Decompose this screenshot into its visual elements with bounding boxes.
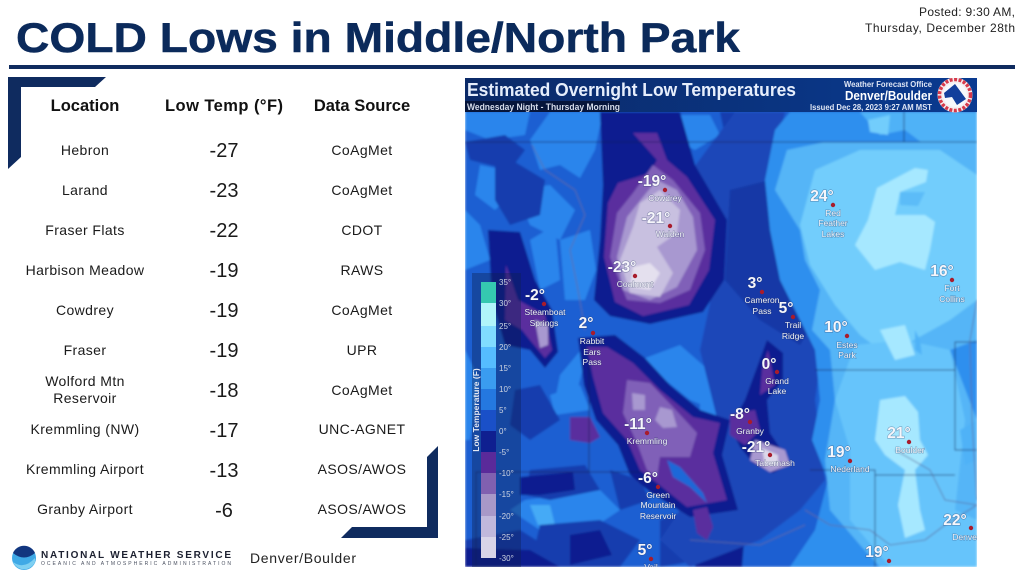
central Rockies dark band: [660, 112, 825, 567]
legend tick labels: -25°: [499, 533, 514, 542]
row: Wolford Mtn Reservoir: [45, 373, 393, 406]
row: Kremmling (NW): UNC-AGNET: [319, 421, 405, 437]
map panel: estimated overnight low temperatures: [465, 78, 980, 572]
Kremmling cold valley: [578, 335, 738, 517]
station names: Steamboat: [524, 307, 566, 317]
table header: [51, 97, 410, 115]
icon: NWS seal: [938, 78, 972, 112]
legend tick labels: -10°: [499, 469, 514, 478]
footer: NWS logo and office: [12, 546, 356, 570]
row: Fraser Flats: -22: [210, 220, 238, 242]
table header: Low Temp (°F): [165, 97, 283, 115]
station names: Lakes: [822, 229, 844, 239]
row: Cowdrey: [56, 300, 393, 322]
row: Kremmling Airport: ASOS/AWOS: [318, 461, 406, 477]
posted timestamp: Posted: 9:30 AM,: [919, 5, 1015, 19]
station names: Grand: [765, 376, 789, 386]
row: Granby Airport: [37, 500, 406, 522]
table: low temperatures by location: [26, 97, 410, 522]
legend tick labels: -30°: [499, 554, 514, 563]
station names: Park: [838, 350, 856, 360]
office name: Denver/Boulder: [250, 550, 356, 566]
legend tick labels: -20°: [499, 512, 514, 521]
posted timestamp: Thursday, December 28th: [865, 21, 1015, 35]
station names: Denver: [952, 532, 980, 542]
station names: Kremmling: [627, 436, 668, 446]
station temperature values: 24°: [810, 188, 834, 205]
station names: Red: [825, 208, 841, 218]
station names: Boulder: [895, 445, 925, 455]
station names: Green: [646, 490, 670, 500]
row: Kremmling (NW): Kremmling (NW): [30, 421, 140, 437]
station names: Ears: [583, 347, 601, 357]
map title: Estimated Overnight Low Temperatures: [467, 79, 796, 100]
title: COLD Lows in Middle/North Park: [16, 14, 741, 61]
row: Fraser: UPR: [347, 342, 377, 358]
row: Larand: Larand: [62, 182, 108, 198]
station temperature values: -23°: [608, 259, 636, 276]
icon: NOAA logo: [12, 546, 36, 570]
row: Cowdrey: CoAgMet: [331, 302, 393, 318]
station names: Tabernash: [755, 458, 795, 468]
forecast office credit: Issued Dec 28, 2023 9:27 AM MST: [810, 103, 932, 112]
row: Hebron: -27: [210, 140, 238, 162]
row: Hebron: CoAgMet: [331, 142, 393, 158]
header rule: [9, 65, 1015, 69]
legend tick labels: 20°: [499, 343, 511, 352]
station temperature values: -19°: [638, 173, 666, 190]
legend tick labels: 35°: [499, 278, 511, 287]
station names: Fort: [944, 283, 960, 293]
station names: Rabbit: [580, 336, 605, 346]
row: Fraser: [64, 340, 377, 362]
row: Fraser: Fraser: [64, 342, 106, 358]
station temperature values: 19°: [827, 444, 851, 461]
row: Larand: -23: [210, 180, 238, 202]
station names: Reservoir: [640, 511, 676, 521]
legend tick labels: 0°: [499, 427, 507, 436]
bottom-right corner bracket: [341, 446, 438, 538]
table header: Location: [51, 97, 119, 115]
row: Wolford Mtn Reservoir: CoAgMet: [331, 382, 393, 398]
table header: Data Source: [314, 97, 410, 115]
station temperature values: 5°: [638, 542, 652, 559]
station temperature values: -8°: [730, 406, 750, 423]
station temperature values: 22°: [943, 512, 967, 529]
row: Wolford Mtn Reservoir: Wolford Mtn: [45, 373, 125, 389]
rivers and roads: [532, 145, 977, 545]
boundary lines: [465, 112, 977, 567]
station dots: [542, 188, 973, 563]
station names: Nederland: [830, 464, 870, 474]
row: Larand: [62, 180, 393, 202]
station temperature values: -2°: [525, 287, 545, 304]
legend tick labels: 5°: [499, 406, 507, 415]
row: Granby Airport: Granby Airport: [37, 501, 133, 517]
row: Kremmling Airport: [26, 460, 406, 482]
row: Kremmling (NW): [30, 420, 405, 442]
station temperature values: 19°: [865, 544, 889, 561]
station names: Coalmont: [617, 279, 654, 289]
NWS wordmark: NATIONAL WEATHER SERVICE: [41, 550, 231, 561]
station names: Collins: [939, 294, 965, 304]
station temperature values: 10°: [824, 319, 848, 336]
row: Cowdrey: Cowdrey: [56, 302, 114, 318]
row: Cowdrey: -19: [210, 300, 238, 322]
legend tick labels: -15°: [499, 490, 514, 499]
station names: Ridge: [782, 331, 804, 341]
legend tick labels: [499, 278, 514, 563]
row: Kremmling Airport: -13: [210, 460, 238, 482]
station temperature values: 5°: [779, 300, 793, 317]
legend tick labels: 10°: [499, 385, 511, 394]
west light patches: [465, 112, 730, 530]
row: Harbison Meadow: [26, 260, 384, 282]
temperature map contours: [465, 78, 977, 567]
station temperature values: -21°: [642, 210, 670, 227]
station names: Vail: [644, 562, 658, 572]
station names: Granby: [736, 426, 765, 436]
row: Larand: CoAgMet: [331, 182, 393, 198]
station temperature values: -11°: [624, 416, 652, 433]
forecast office credit: Denver/Boulder: [845, 89, 932, 103]
station names: Cameron: [745, 295, 780, 305]
station names: Springs: [530, 318, 558, 328]
station temperature values: -6°: [638, 470, 658, 487]
row: Kremmling (NW): -17: [210, 420, 238, 442]
legend tick labels: 15°: [499, 364, 511, 373]
station names: Walden: [656, 229, 685, 239]
legend axis title: Low Temperature (F): [471, 368, 481, 452]
forecast office credit: [810, 80, 933, 112]
North Park cold basin: [594, 112, 727, 324]
row: Harbison Meadow: -19: [210, 260, 238, 282]
west dark patches: [465, 112, 735, 567]
row: Wolford Mtn Reservoir: Reservoir: [53, 390, 117, 406]
row: Hebron: [61, 140, 393, 162]
station names: Mountain: [641, 500, 676, 510]
row: Fraser Flats: [45, 220, 383, 242]
station temperature values: 0°: [762, 356, 776, 373]
row: Harbison Meadow: Harbison Meadow: [26, 262, 145, 278]
row: Fraser: -19: [210, 340, 238, 362]
legend tick labels: 25°: [499, 322, 511, 331]
station names: Pass: [583, 357, 601, 367]
top-left corner bracket: [8, 77, 106, 169]
station temperature values: 2°: [579, 315, 593, 332]
row: Hebron: Hebron: [61, 142, 109, 158]
map subtitle: Wednesday Night - Thursday Morning: [467, 102, 620, 113]
station temperature values: -21°: [742, 439, 770, 456]
Grand Lake, Granby and Tabernash pockets: [736, 340, 784, 474]
station names: Estes: [836, 340, 858, 350]
station temperature values: 3°: [748, 275, 762, 292]
NOAA wordmark: OCEANIC AND ATMOSPHERIC ADMINISTRATION: [41, 561, 231, 567]
row: Fraser Flats: Fraser Flats: [45, 222, 125, 238]
map header band: [465, 78, 977, 113]
forecast office credit: Weather Forecast Office: [844, 80, 933, 89]
Steamboat cold pocket: [488, 230, 558, 368]
posted timestamp: [865, 5, 1015, 35]
station names: Pass: [753, 306, 771, 316]
eastern plains blue: [765, 112, 977, 567]
row: Granby Airport: ASOS/AWOS: [318, 501, 406, 517]
station names: Trail: [785, 320, 801, 330]
station names: Cowdrey: [648, 193, 683, 203]
row: Wolford Mtn Reservoir: -18: [210, 380, 238, 402]
row: Kremmling Airport: Kremmling Airport: [26, 461, 144, 477]
station temperature values: 21°: [887, 425, 911, 442]
legend tick labels: -5°: [499, 448, 509, 457]
legend: low temperature colour scale: [471, 273, 521, 567]
station names: [524, 193, 980, 572]
station temperature values: 16°: [930, 263, 954, 280]
colour bar: [481, 282, 496, 558]
station temperature values: [525, 173, 967, 561]
station names: Feather: [818, 218, 848, 228]
row: Harbison Meadow: RAWS: [340, 262, 384, 278]
station names: Lake: [768, 386, 786, 396]
row: Granby Airport: -6: [215, 500, 233, 522]
legend tick labels: 30°: [499, 299, 511, 308]
row: Fraser Flats: CDOT: [341, 222, 383, 238]
